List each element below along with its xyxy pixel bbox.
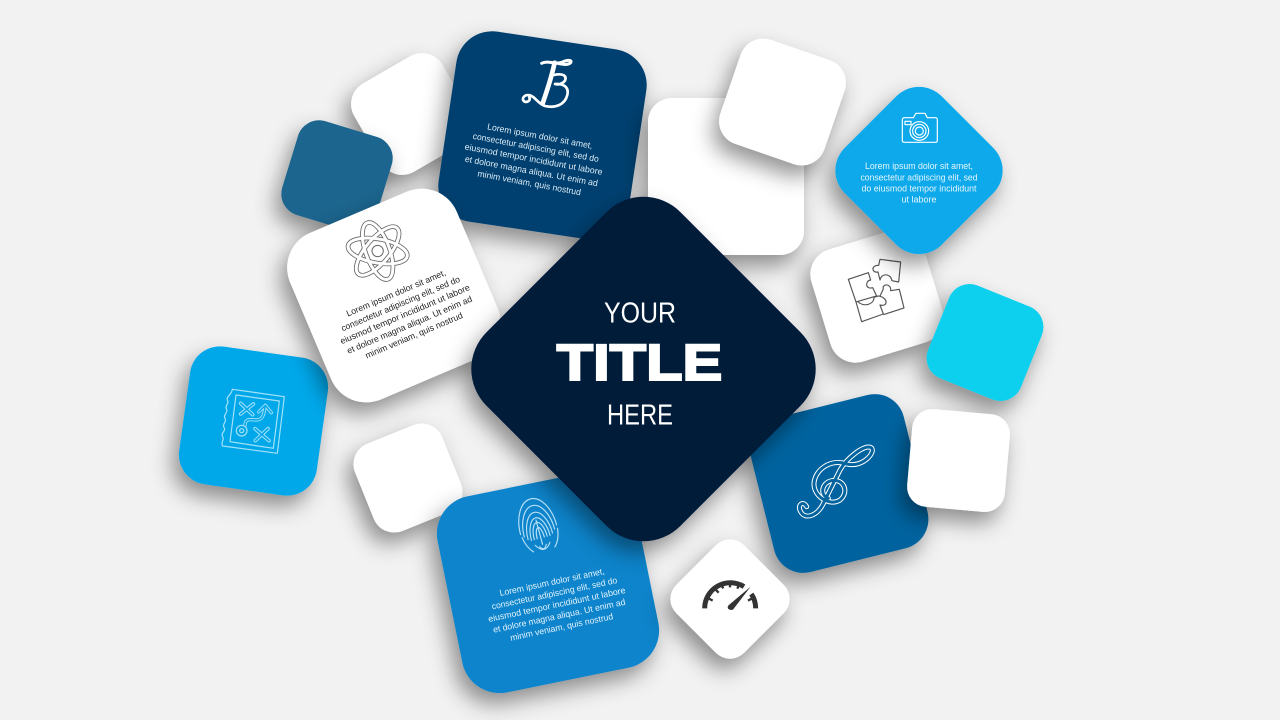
panel: music card xyxy=(743,388,935,579)
text block: white atom card xyxy=(330,261,480,367)
text block: camera diamond: do eiusmod tempor incididunt xyxy=(862,184,977,194)
text block: navy card: minim veniam, quis nostrud xyxy=(477,168,582,197)
heading: here: HERE xyxy=(607,400,673,432)
icon: camera xyxy=(902,113,937,142)
heading: your: YOUR xyxy=(604,298,676,330)
text block: white atom card: eiusmod tempor incididunt ut labore xyxy=(339,282,471,346)
text block: fingerprint card: Lorem ipsum dolor sit amet, xyxy=(499,566,605,598)
panel: white card with puzzle xyxy=(804,223,950,369)
heading: title: TITLE xyxy=(557,334,722,391)
tile: white lower left xyxy=(347,417,469,539)
text block: fingerprint card: minim veniam, quis nostrud xyxy=(509,611,614,643)
tile: cyan xyxy=(920,277,1050,408)
tile: white upper left xyxy=(342,44,482,184)
panel: blue card with strategy map xyxy=(175,343,332,499)
icon: atom xyxy=(346,219,409,283)
text block: fingerprint card xyxy=(482,563,631,646)
panel: blue card with fingerprint xyxy=(430,464,666,700)
icon: strategy map xyxy=(222,389,284,453)
tile: white lower right xyxy=(905,407,1012,514)
tile: teal xyxy=(276,115,398,237)
text block: navy card: et dolore magna aliqua. Ut enim ad xyxy=(464,154,599,188)
icon: puzzle xyxy=(848,259,904,322)
text block: camera diamond: consectetur adipiscing elit, sed xyxy=(860,172,978,182)
panel: central title diamond xyxy=(450,175,837,563)
text block: white atom card: consectetur adipiscing elit, sed do xyxy=(340,274,461,333)
panel: camera diamond xyxy=(822,74,1016,267)
panel: navy card with monogram xyxy=(433,26,652,245)
text block: navy card: consectetur adipiscing elit, sed do xyxy=(472,131,600,164)
icon: speedometer gauge xyxy=(705,582,756,610)
text block: fingerprint card: consectetur adipiscing elit, sed do xyxy=(491,575,618,611)
text block: camera diamond: Lorem ipsum dolor sit amet, xyxy=(865,161,973,171)
tile: white upper right xyxy=(713,32,852,172)
text block: camera diamond xyxy=(860,161,978,204)
text block: white atom card: Lorem ipsum dolor sit amet, xyxy=(345,267,447,319)
icon: script letter B xyxy=(523,60,571,107)
text block: camera diamond: ut labore xyxy=(902,194,937,204)
text block: fingerprint card: eiusmod tempor incididunt ut labore xyxy=(487,585,626,624)
text block: white atom card: et dolore magna aliqua. Ut enim ad xyxy=(345,294,474,356)
text block: white atom card: minim veniam, quis nostrud xyxy=(364,310,464,360)
panel: gauge diamond xyxy=(662,531,798,667)
text block: navy card xyxy=(460,118,608,201)
text block: navy card: Lorem ipsum dolor sit amet, xyxy=(486,121,594,151)
panel: white card with atom xyxy=(275,177,513,414)
icon: treble clef xyxy=(799,447,872,516)
text block: fingerprint card: et dolore magna aliqua. Ut enim ad xyxy=(492,597,626,635)
text block: navy card: eiusmod tempor incididunt ut labore xyxy=(464,142,603,177)
icon: fingerprint xyxy=(512,494,562,555)
tile: large white square xyxy=(648,98,804,255)
